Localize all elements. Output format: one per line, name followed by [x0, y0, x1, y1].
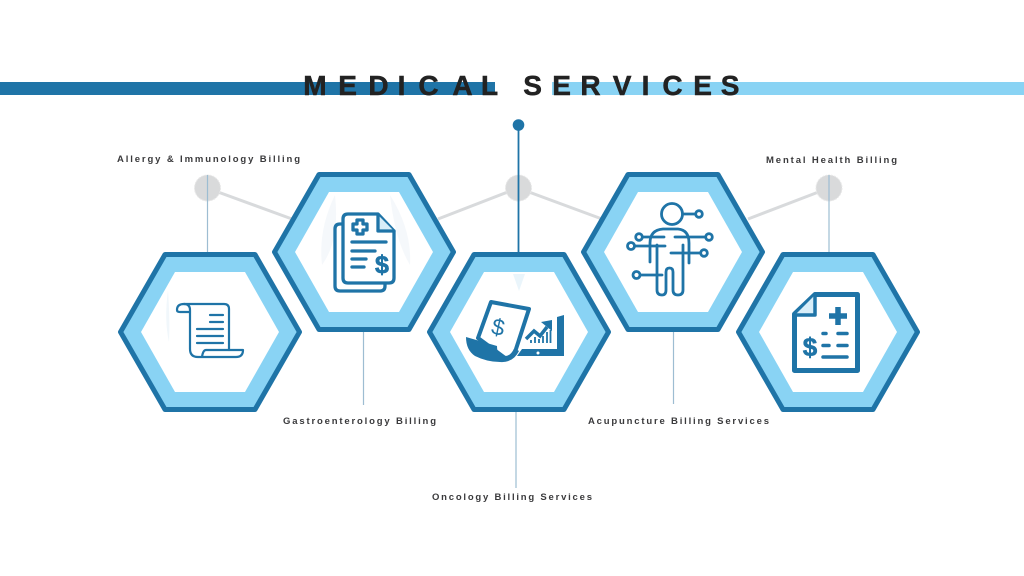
- icon: bill with plus: [794, 294, 858, 370]
- hexagon 5: [738, 254, 918, 410]
- center pin: [513, 119, 524, 253]
- label: allergy: Allergy & Immunology Billing: [117, 154, 300, 165]
- label: acupuncture: Acupuncture Billing Services: [588, 416, 769, 427]
- hexagon 3: [430, 254, 608, 410]
- icon: bill with plus: $: [803, 332, 818, 362]
- icon: invoice and chart: $: [489, 313, 507, 341]
- header bar: [0, 82, 1024, 95]
- title: MEDICAL SERVICES: [303, 70, 739, 101]
- icon: medical bill documents: $: [375, 251, 389, 279]
- hexagon 4: [584, 174, 762, 330]
- icon: medical bill documents: [335, 214, 394, 291]
- hexagon 1: [120, 254, 300, 410]
- label: mental health: Mental Health Billing: [766, 155, 897, 166]
- connector network: [194, 175, 842, 488]
- label: gastroenterology: Gastroenterology Billing: [283, 416, 436, 427]
- icon: scroll: [177, 304, 243, 357]
- icon: acupuncture body: [628, 204, 712, 295]
- label: oncology: Oncology Billing Services: [432, 492, 592, 503]
- icon: invoice and chart: [466, 302, 564, 362]
- hexagon 2: [274, 174, 454, 330]
